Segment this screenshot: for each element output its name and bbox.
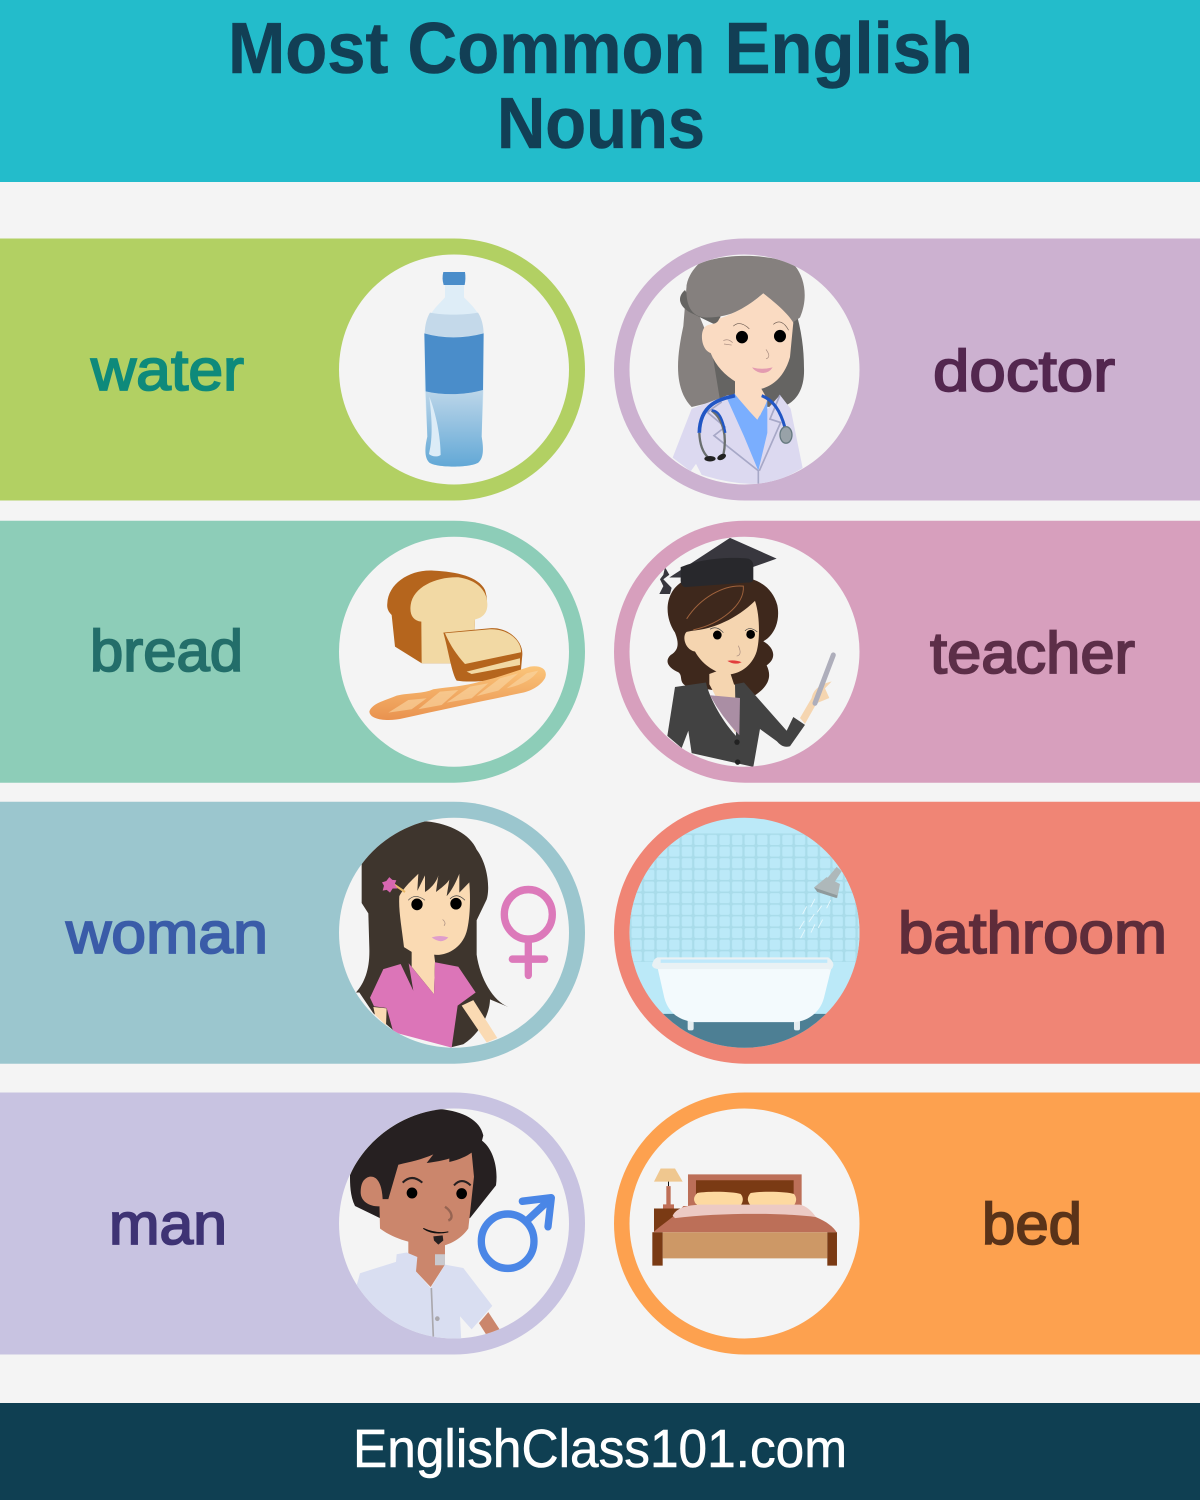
panel: water [0, 238, 585, 500]
title: Most Common English [228, 9, 973, 89]
illustration: woman [356, 821, 552, 1048]
word: bed: bed [982, 1192, 1082, 1257]
illustration: man [350, 1109, 551, 1347]
illustration: doctor [673, 256, 805, 484]
icon: bread loaf and baguette [369, 571, 546, 720]
header band [0, 0, 1200, 182]
word: woman: woman [65, 901, 268, 966]
word: bread: bread [90, 619, 243, 684]
panel: doctor [614, 238, 1200, 500]
icon: bed with lamp [652, 1169, 837, 1266]
illustration: bathroom [620, 833, 870, 1051]
word: bathroom: bathroom [898, 901, 1167, 966]
panel: woman [0, 802, 585, 1064]
illustration: teacher [659, 538, 833, 767]
word: teacher: teacher [930, 621, 1135, 686]
panel: bread [0, 521, 585, 783]
word: water: water [90, 338, 244, 403]
title: Nouns [497, 84, 705, 164]
icon: water bottle [424, 272, 484, 467]
word: doctor: doctor [933, 339, 1115, 404]
word: man: man [109, 1192, 227, 1257]
footer band [0, 1403, 1200, 1500]
panel: man [0, 1092, 585, 1354]
panel: bed [614, 1092, 1200, 1354]
title [228, 9, 973, 164]
footer text: EnglishClass101.com [353, 1419, 847, 1479]
panel: teacher [614, 521, 1200, 783]
panel: bathroom [614, 802, 1200, 1064]
